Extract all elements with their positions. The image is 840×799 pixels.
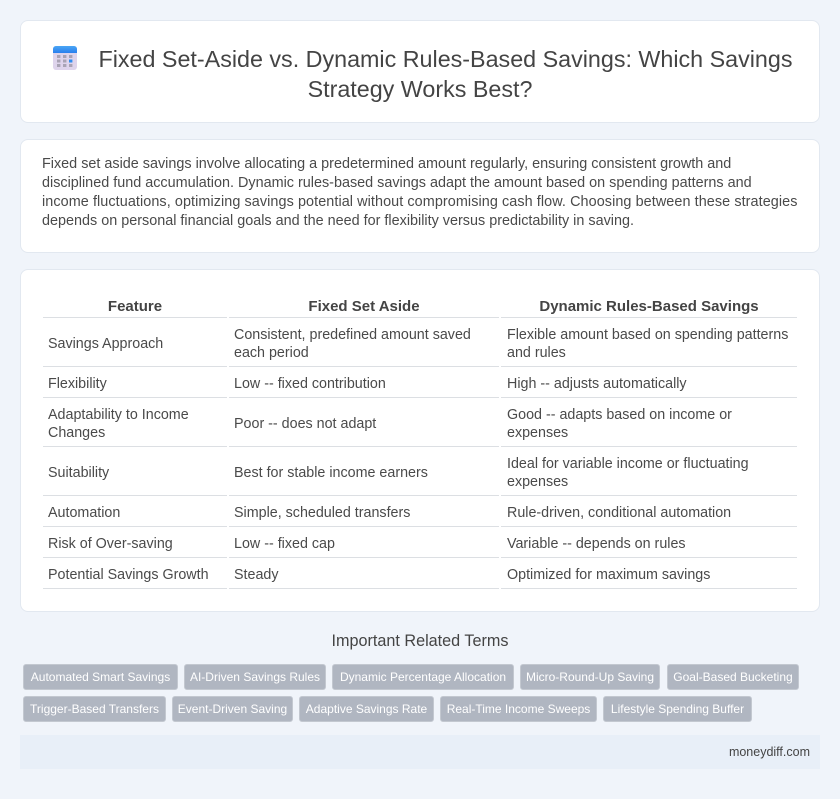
row: Potential Savings Growth xyxy=(48,567,710,583)
text block: summary: Fixed set aside savings involve allocating a predetermined amount regularly, ensuring consistent growth and xyxy=(42,156,731,172)
tag: Goal-Based Bucketing xyxy=(673,670,793,684)
text block: summary: income fluctuations, optimizing savings potential without compromising cash flow. Choosing between these strategies xyxy=(42,194,798,210)
row: Adaptability: Good -- adapts based on income or xyxy=(507,407,732,423)
table header xyxy=(108,298,759,315)
row: Suitability xyxy=(48,456,749,490)
row: Potential Savings Growth: Optimized for maximum savings xyxy=(507,567,710,583)
row: Flexibility: High -- adjusts automatically xyxy=(507,376,687,392)
tag xyxy=(667,664,799,690)
row: Adaptability xyxy=(48,407,732,441)
tag: Trigger-Based Transfers xyxy=(30,702,159,716)
row: Risk of Over-saving: Low -- fixed cap xyxy=(234,536,335,552)
row: Risk of Over-saving xyxy=(48,536,686,552)
tag: AI-Driven Savings Rules xyxy=(190,670,320,684)
text block: summary: disciplined fund accumulation. Dynamic rules-based savings adapt the amount based on spending patterns and xyxy=(42,175,752,191)
footer bar xyxy=(20,735,820,769)
row: Adaptability: Adaptability to Income xyxy=(48,407,189,423)
row: Adaptability: Changes xyxy=(48,425,105,441)
row: Adaptability: Poor -- does not adapt xyxy=(234,416,376,432)
row: Savings Approach: Savings Approach xyxy=(48,336,163,352)
tag xyxy=(23,696,166,722)
table header: Fixed Set Aside xyxy=(308,298,420,315)
title: Fixed Set-Aside vs. Dynamic Rules-Based Savings: Which Savings xyxy=(98,46,792,72)
tag xyxy=(332,664,514,690)
tag: Adaptive Savings Rate xyxy=(306,702,427,716)
row: Flexibility: Low -- fixed contribution xyxy=(234,376,386,392)
title: Strategy Works Best? xyxy=(308,76,532,102)
row: Adaptability: expenses xyxy=(507,425,568,441)
row: Flexibility: Flexibility xyxy=(48,376,107,392)
row: Savings Approach xyxy=(48,327,788,361)
row: Suitability: expenses xyxy=(507,474,568,490)
row: Automation: Rule-driven, conditional automation xyxy=(507,505,731,521)
heading: Important Related Terms: Important Related Terms xyxy=(332,632,508,650)
row: Automation: Simple, scheduled transfers xyxy=(234,505,410,521)
row: Automation xyxy=(48,505,731,521)
table header: Dynamic Rules-Based Savings xyxy=(539,298,759,315)
footer text: moneydiff.com xyxy=(729,745,810,759)
row: Flexibility xyxy=(48,376,687,392)
row: Suitability: Suitability xyxy=(48,465,109,481)
tag xyxy=(299,696,434,722)
table header: Feature xyxy=(108,298,162,315)
row: Savings Approach: and rules xyxy=(507,345,566,361)
row: Potential Savings Growth: Steady xyxy=(234,567,279,583)
panel: comparison table xyxy=(20,269,820,612)
row: Potential Savings Growth: Potential Savings Growth xyxy=(48,567,209,583)
row: Savings Approach: Consistent, predefined amount saved xyxy=(234,327,471,343)
tag: Automated Smart Savings xyxy=(31,670,170,684)
row: Savings Approach: each period xyxy=(234,345,309,361)
row: Automation: Automation xyxy=(48,505,120,521)
panel: title header xyxy=(20,20,820,123)
row: Risk of Over-saving: Variable -- depends on rules xyxy=(507,536,686,552)
title xyxy=(98,46,792,102)
tag: Micro-Round-Up Saving xyxy=(526,670,654,684)
tag list: related terms xyxy=(23,664,799,722)
panel: summary paragraph xyxy=(20,139,820,253)
row: Savings Approach: Flexible amount based on spending patterns xyxy=(507,327,788,343)
tag: Dynamic Percentage Allocation xyxy=(340,670,506,684)
tag: Event-Driven Saving xyxy=(178,702,287,716)
tag xyxy=(440,696,597,722)
text block: summary: depends on personal financial goals and the need for flexibility versus predictability in saving. xyxy=(42,213,634,229)
tag xyxy=(520,664,660,690)
tag: Real-Time Income Sweeps xyxy=(447,702,590,716)
tag xyxy=(184,664,326,690)
icon: calendar xyxy=(53,46,77,70)
row: Suitability: Ideal for variable income or fluctuating xyxy=(507,456,749,472)
tag: Lifestyle Spending Buffer xyxy=(611,702,744,716)
tag xyxy=(23,664,178,690)
tag xyxy=(172,696,293,722)
row: Suitability: Best for stable income earners xyxy=(234,465,428,481)
text block: summary xyxy=(42,156,798,229)
tag xyxy=(603,696,752,722)
row: Risk of Over-saving: Risk of Over-saving xyxy=(48,536,173,552)
